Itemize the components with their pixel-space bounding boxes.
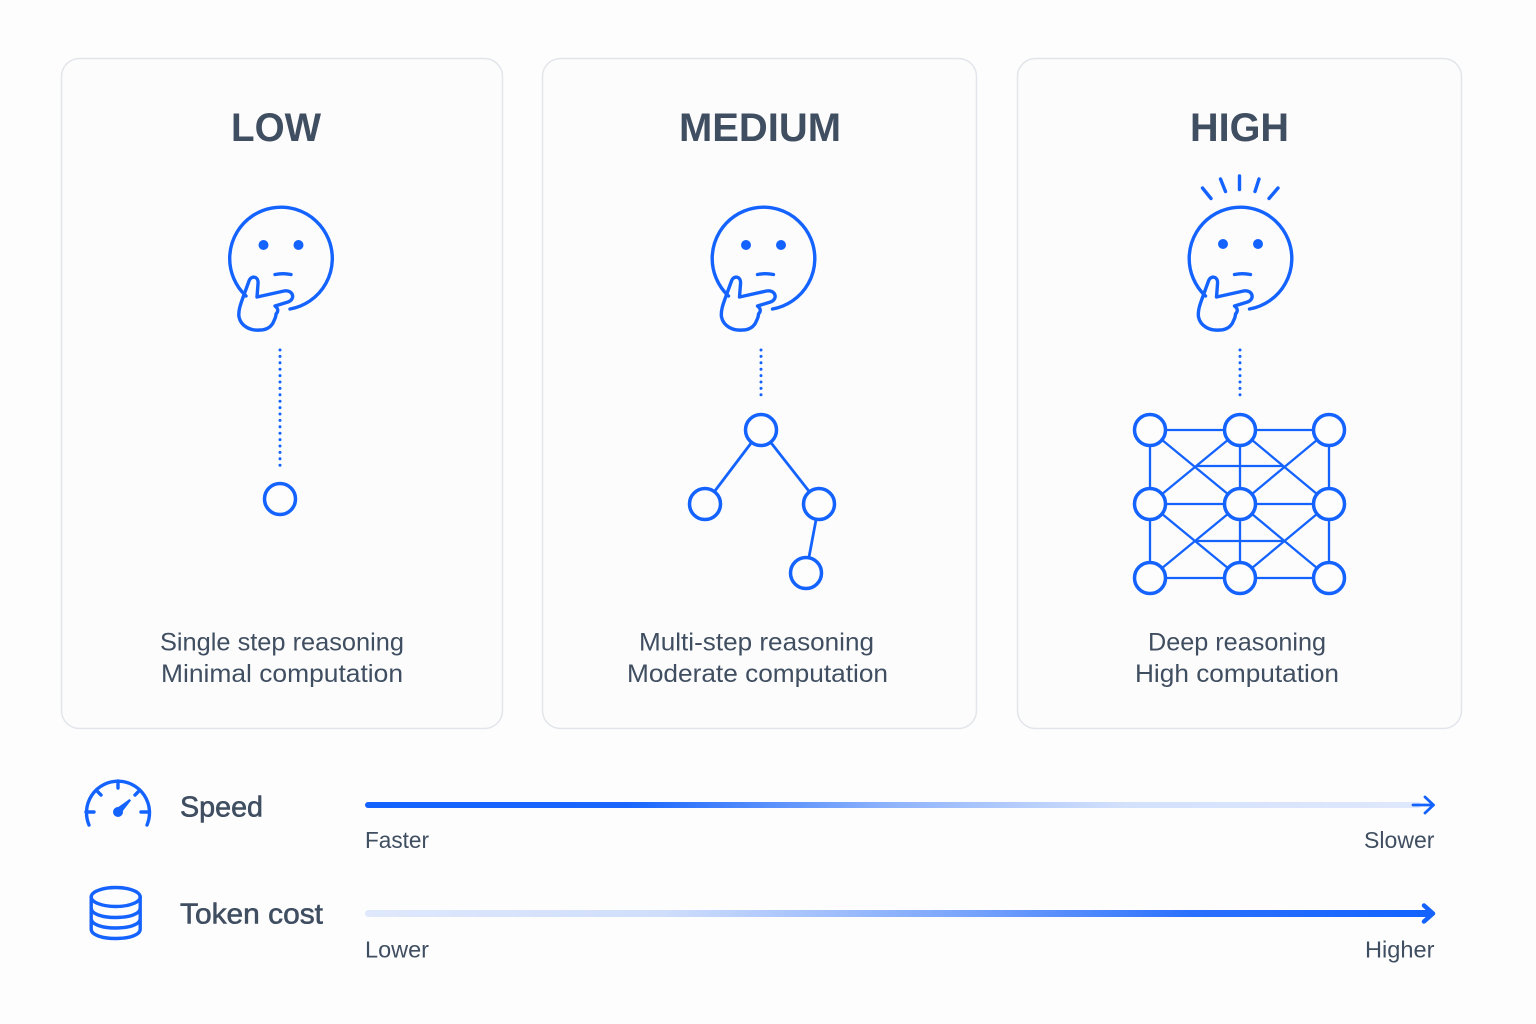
bar: token cost gradient arrow — [365, 906, 1433, 922]
row: token cost — [91, 888, 1435, 962]
description: medium: Multi-step reasoning — [639, 628, 874, 656]
label: slower: Slower — [1364, 827, 1435, 853]
heading: MEDIUM: MEDIUM — [679, 106, 841, 150]
label: faster: Faster — [365, 827, 429, 853]
heading: LOW: LOW — [231, 106, 321, 150]
label: token cost: Token cost — [180, 898, 323, 930]
description: high: Deep reasoning — [1148, 628, 1326, 656]
description: low: Minimal computation — [161, 660, 403, 688]
description: low: Single step reasoning — [160, 628, 404, 656]
row: speed — [86, 781, 1435, 853]
label: higher: Higher — [1365, 936, 1435, 962]
diagram: dense reasoning network — [1134, 414, 1344, 594]
description: low — [160, 628, 404, 688]
panel: low — [62, 58, 502, 728]
icon: thinking face with spark lines — [1189, 176, 1292, 330]
connector: dotted line — [760, 350, 762, 396]
description: medium — [627, 628, 888, 688]
diagram: reasoning tree — [690, 414, 834, 588]
icon: coin stack — [91, 888, 140, 938]
description: high — [1135, 628, 1339, 688]
heading: HIGH: HIGH — [1190, 106, 1289, 150]
icon: speedometer — [86, 781, 150, 825]
connector: dotted line — [278, 350, 282, 466]
label: speed: Speed — [180, 792, 263, 824]
panel: high — [1018, 58, 1462, 728]
icon: thinking face — [230, 207, 332, 330]
description: medium: Moderate computation — [627, 660, 888, 688]
panel: medium — [542, 58, 976, 728]
icon: thinking face — [712, 207, 815, 330]
description: high: High computation — [1135, 660, 1339, 688]
bar: speed gradient arrow — [365, 797, 1434, 813]
icon: single node — [264, 484, 296, 514]
label: lower: Lower — [365, 936, 429, 962]
connector: dotted line — [1238, 350, 1242, 396]
